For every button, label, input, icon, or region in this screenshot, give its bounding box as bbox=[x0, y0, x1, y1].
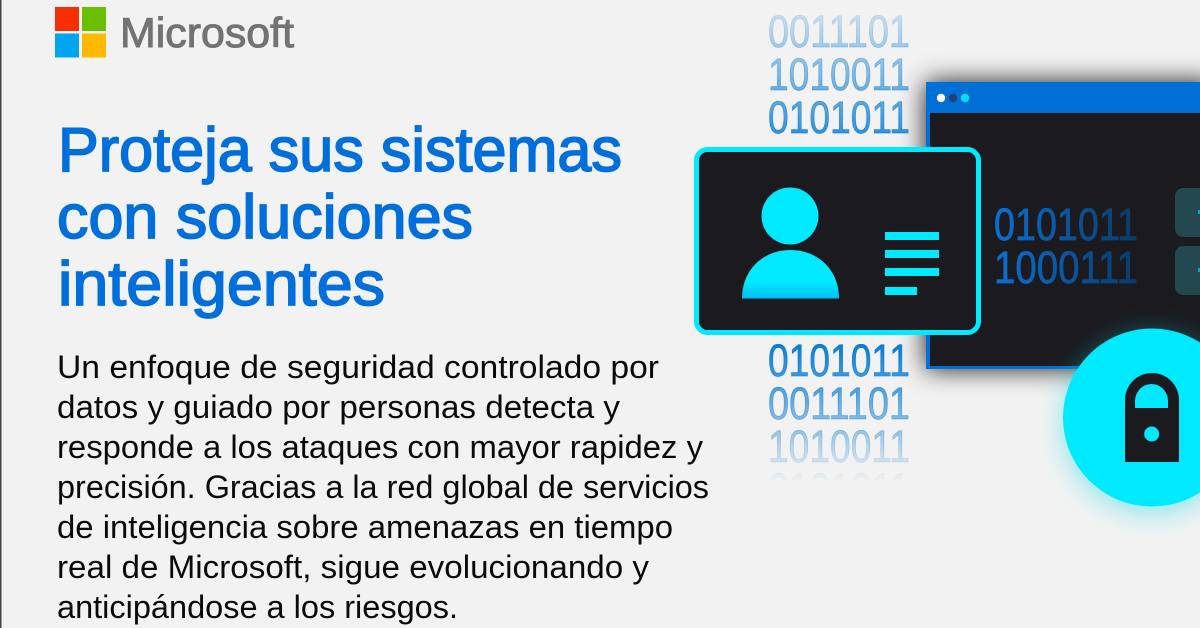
title: inteligentes bbox=[58, 250, 385, 319]
icon: text lines bbox=[885, 232, 939, 295]
body text: real de Microsoft, sigue evolucionando y bbox=[57, 549, 649, 585]
icon: lock badge bbox=[1063, 328, 1200, 506]
window control dots bbox=[937, 94, 969, 102]
title bbox=[57, 116, 622, 319]
binary column: lower: 0011101 bbox=[768, 378, 910, 429]
body text: datos y guiado por personas detecta y bbox=[57, 389, 620, 425]
window shadow bbox=[926, 82, 1200, 369]
body text: Un enfoque de seguridad controlado por bbox=[57, 349, 659, 385]
binary column: lower: 1010011 bbox=[768, 421, 910, 472]
window binary text bbox=[994, 199, 1138, 293]
body text: de inteligencia sobre amenazas en tiempo bbox=[57, 509, 673, 545]
binary column: upper: 0101011 bbox=[768, 92, 910, 143]
window binary text: 1000111 bbox=[994, 242, 1138, 293]
title: con soluciones bbox=[57, 183, 473, 252]
panel: identity card bbox=[696, 150, 978, 332]
binary column: upper bbox=[768, 6, 910, 143]
panel: code window bbox=[926, 82, 1200, 369]
binary column: upper: 1010011 bbox=[768, 49, 910, 100]
logo: Microsoft bbox=[55, 7, 294, 58]
body text: precisión. Gracias a la red global de servicios bbox=[57, 469, 709, 505]
window buttons bbox=[1175, 188, 1200, 295]
binary column: lower bbox=[768, 335, 910, 515]
binary column: upper: 0011101 bbox=[768, 6, 910, 57]
binary column: lower: 0101011 bbox=[768, 464, 910, 515]
binary column: lower: 0101011 bbox=[768, 335, 910, 386]
body text: responde a los ataques con mayor rapidez y bbox=[57, 429, 703, 465]
icon: person bbox=[742, 188, 839, 298]
body text: anticipándose a los riesgos. bbox=[57, 589, 458, 625]
title: Proteja sus sistemas bbox=[58, 116, 622, 185]
wordmark: Microsoft bbox=[120, 9, 294, 56]
icon: four-colour squares bbox=[55, 7, 106, 58]
body text bbox=[57, 349, 709, 625]
lock glow bbox=[1062, 334, 1200, 514]
window binary text: 0101011 bbox=[994, 199, 1138, 250]
